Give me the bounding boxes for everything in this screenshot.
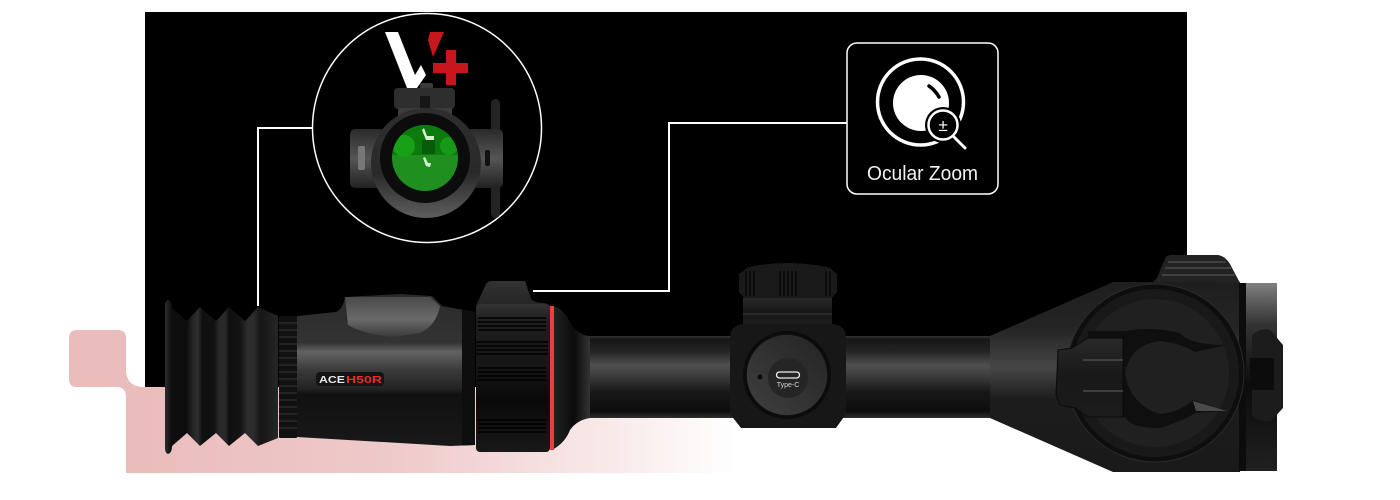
turret block — [730, 324, 846, 428]
callout: front view circle — [312, 14, 542, 242]
objective bell — [990, 255, 1283, 472]
objective top fin — [1153, 255, 1240, 283]
neck flare behind focus ring — [550, 305, 590, 450]
pink stepped gradient band — [69, 330, 735, 473]
Type-C cover disc — [743, 331, 831, 419]
eyepiece body — [297, 294, 476, 450]
infographic canvas — [69, 12, 1283, 473]
badge: ACE H50R — [316, 372, 384, 386]
black backdrop panel — [145, 12, 1187, 387]
main tube — [580, 336, 1000, 418]
badge: ACE H50R: H50R — [346, 375, 383, 386]
connector line: ocular zoom box to focus ring — [533, 123, 848, 291]
red accent band — [550, 306, 554, 450]
label: Ocular Zoom: Ocular Zoom — [867, 163, 978, 185]
focus ring with fin — [476, 281, 554, 452]
badge: ACE H50R: ACE — [319, 375, 345, 386]
scope side view — [165, 255, 1283, 472]
connector line: V+ lens circle to eyepiece — [258, 128, 312, 306]
knurled diopter ring — [279, 316, 297, 438]
rear hinge — [1252, 329, 1283, 422]
icon: lens with magnifier — [878, 59, 965, 148]
turret neck — [743, 298, 832, 325]
turret and Type-C cover — [730, 263, 846, 428]
Type-C cover disc: Type-C — [777, 382, 799, 389]
turret cap — [739, 263, 837, 298]
logo: V+ mark — [385, 32, 468, 88]
scope front view with green night-vision lens — [350, 83, 503, 218]
icon: lens with magnifier: ± — [938, 116, 948, 135]
callout: ocular zoom box — [847, 43, 998, 194]
cap clasp tab — [1056, 338, 1123, 417]
eyecup bellows — [165, 300, 278, 454]
objective cap — [1066, 284, 1244, 462]
